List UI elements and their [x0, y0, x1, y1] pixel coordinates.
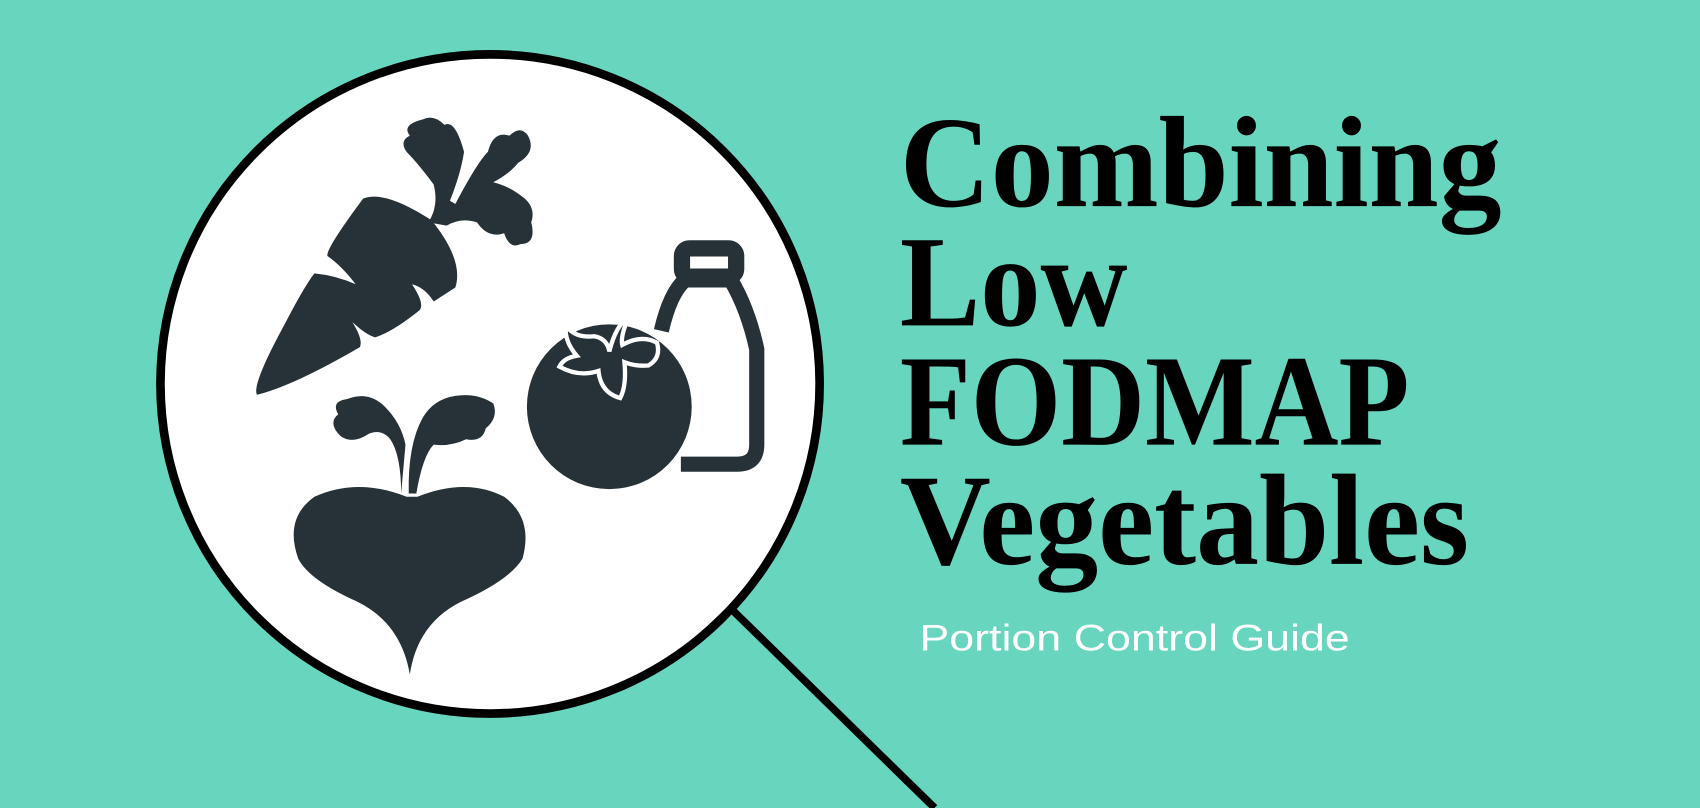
- title: Vegetables: [900, 449, 1469, 593]
- title: Low: [900, 210, 1128, 354]
- icon: carrot: [256, 118, 533, 395]
- magnifier handle: [733, 611, 935, 808]
- icon: beet: [294, 395, 526, 675]
- title: [900, 91, 1502, 593]
- title: Combining: [900, 91, 1502, 235]
- magnifier lens: [160, 54, 820, 714]
- subtitle: Portion Control Guide: [919, 618, 1350, 659]
- title: FODMAP: [900, 330, 1409, 474]
- icon: tomato: [527, 317, 692, 489]
- icon: bottle: [661, 248, 757, 464]
